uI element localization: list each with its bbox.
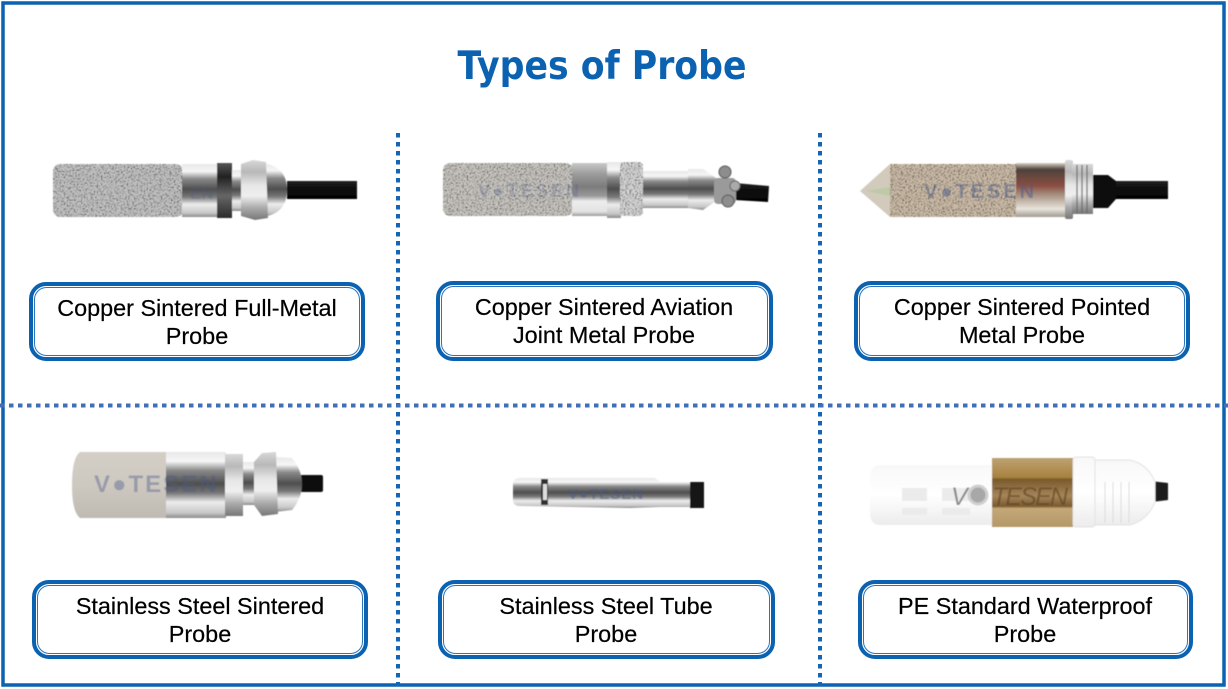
label: copper sintered full-metal probe: Copper Sintered Full-Metal <box>57 295 337 321</box>
label: copper sintered full-metal probe <box>31 284 363 359</box>
label: stainless steel tube probe: Stainless Steel Tube <box>499 593 713 619</box>
icon: pointed probe photo: V●TESEN <box>924 181 1037 203</box>
label: copper sintered aviation joint metal probe: Joint Metal Probe <box>513 322 695 348</box>
label: copper sintered aviation joint metal probe: Copper Sintered Aviation <box>475 294 733 320</box>
icon: full-metal probe photo: EN <box>190 184 214 203</box>
panel: copper sintered pointed metal probe <box>856 160 1188 359</box>
label: PE standard waterproof probe <box>860 582 1191 657</box>
icon: aviation joint probe photo: V●TESEN <box>478 181 582 201</box>
icon: aviation joint probe photo <box>443 162 769 218</box>
label: stainless steel sintered probe: Stainless Steel Sintered <box>76 593 324 619</box>
panel: copper sintered aviation joint metal probe <box>438 162 771 359</box>
icon: stainless sintered probe photo: V●TESEN <box>94 471 219 498</box>
label: stainless steel tube probe: Probe <box>575 621 637 647</box>
icon: stainless sintered probe photo <box>72 452 323 518</box>
icon: PE waterproof probe photo: V <box>951 483 970 511</box>
label: copper sintered full-metal probe: Probe <box>166 323 228 349</box>
icon: PE waterproof probe photo <box>870 457 1168 527</box>
panel: PE standard waterproof probe <box>860 457 1191 657</box>
icon: stainless tube probe photo: V●TESEN <box>568 486 644 503</box>
label: stainless steel sintered probe <box>34 582 366 657</box>
panel: stainless steel tube probe <box>440 478 773 657</box>
label: copper sintered pointed metal probe: Copper Sintered Pointed <box>894 294 1150 320</box>
label: copper sintered pointed metal probe: Metal Probe <box>959 322 1085 348</box>
icon: stainless tube probe photo <box>513 478 704 508</box>
panel: stainless steel sintered probe <box>34 452 366 657</box>
icon: PE waterproof probe photo: TESEN <box>992 483 1069 511</box>
icon: pointed probe photo <box>860 160 1168 219</box>
label: copper sintered aviation joint metal probe <box>438 283 771 359</box>
label: stainless steel tube probe <box>440 582 773 657</box>
label: PE standard waterproof probe: Probe <box>994 621 1056 647</box>
label: copper sintered pointed metal probe <box>856 283 1188 359</box>
title: Types of Probe <box>458 44 746 89</box>
label: PE standard waterproof probe: PE Standard Waterproof <box>898 593 1152 619</box>
panel: copper sintered full-metal probe <box>31 160 363 359</box>
icon: full-metal probe photo <box>53 160 357 220</box>
label: stainless steel sintered probe: Probe <box>169 621 231 647</box>
